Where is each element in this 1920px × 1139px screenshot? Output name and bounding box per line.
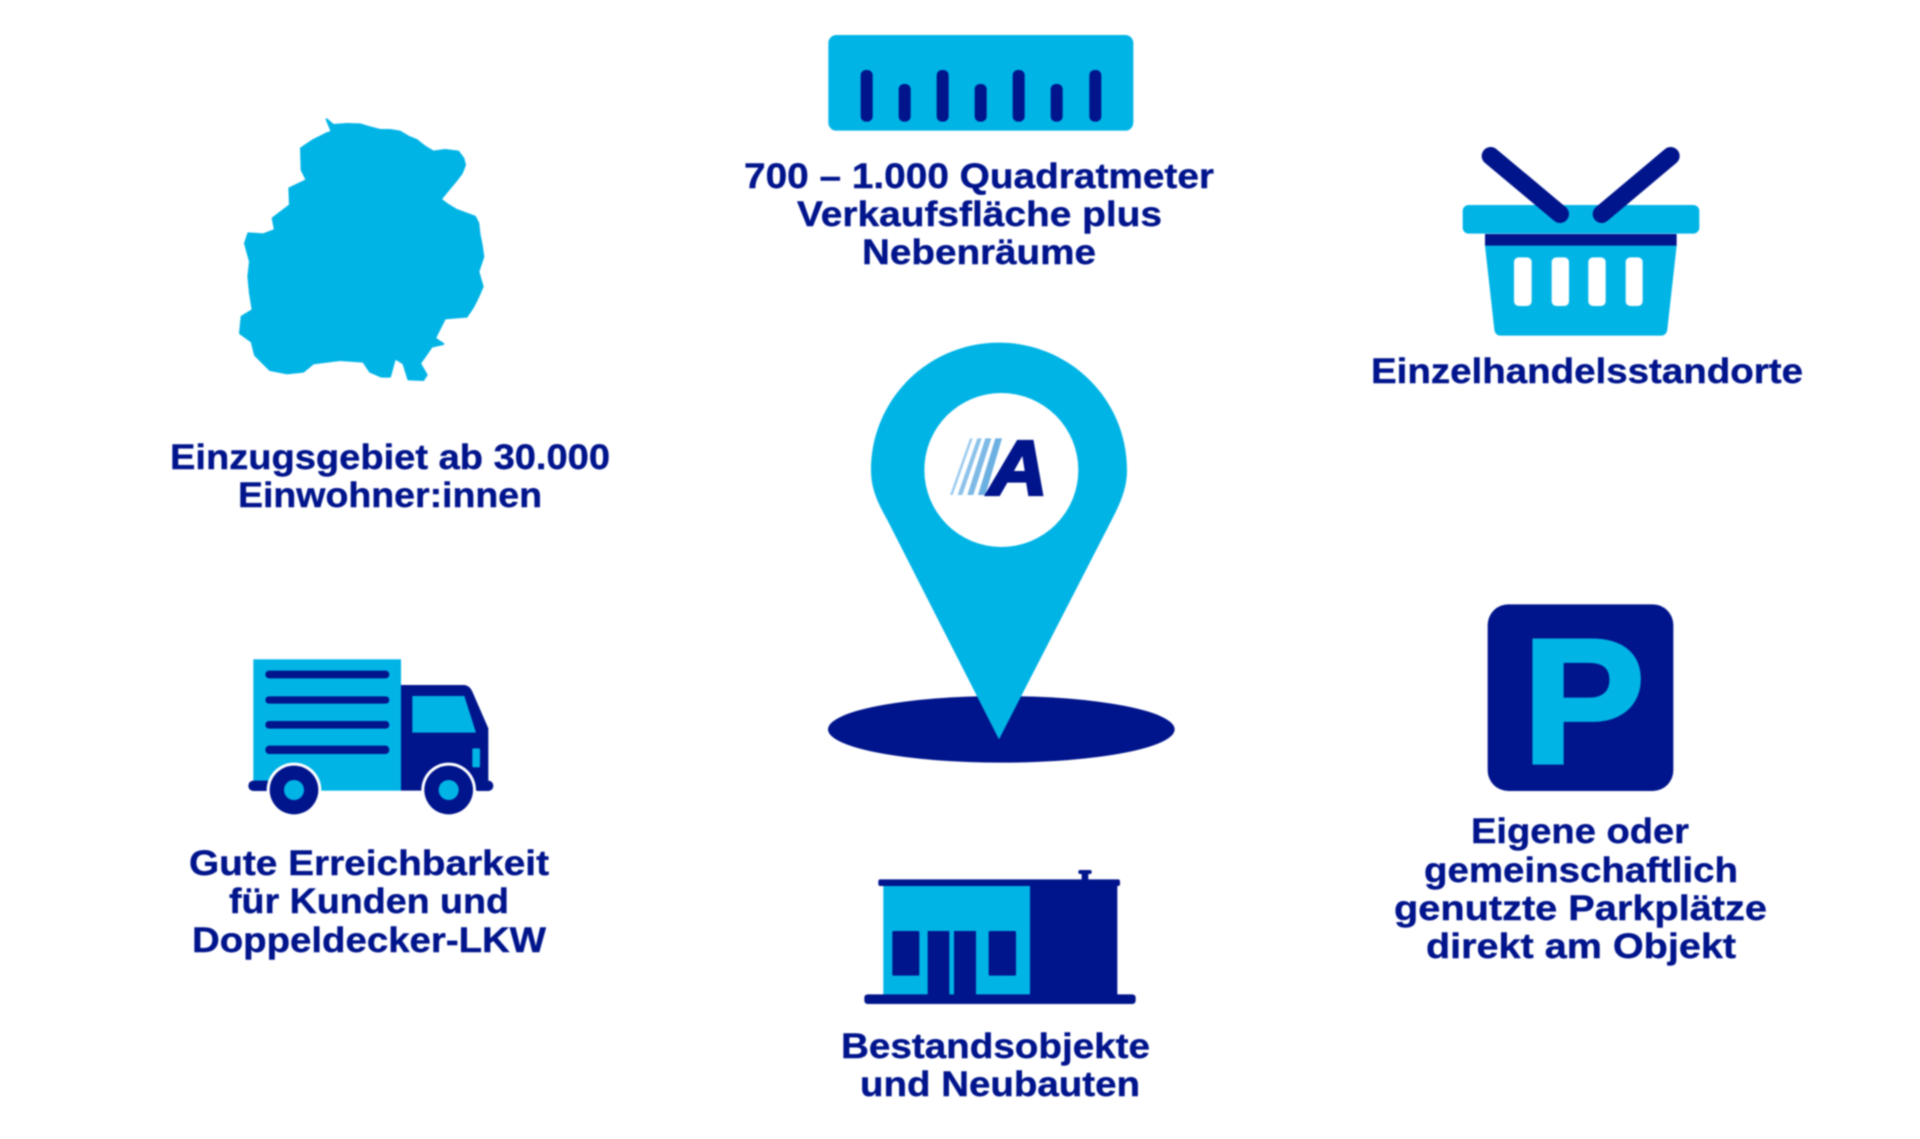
text: retail locations: Einzelhandelsstandorte (1371, 352, 1803, 391)
text: sales area (744, 157, 1214, 272)
text: accessibility: für Kunden und (229, 882, 509, 921)
logo: letter A: A (987, 425, 1047, 511)
text: catchment area (170, 438, 610, 515)
text: accessibility: Gute Erreichbarkeit (189, 844, 549, 883)
text: accessibility (189, 844, 549, 960)
text: existing and new buildings (841, 1027, 1150, 1104)
icon: location pin with logo (828, 343, 1175, 763)
icon: parking sign: P (1523, 603, 1645, 800)
icon: catchment area map (240, 119, 483, 380)
text: existing and new buildings: und Neubauten (860, 1065, 1140, 1104)
icon: delivery truck (248, 659, 493, 817)
text: parking: Eigene oder (1471, 812, 1689, 851)
icon: parking sign (1488, 603, 1673, 800)
text: parking: direkt am Objekt (1426, 927, 1736, 966)
text: existing and new buildings: Bestandsobjekte (841, 1027, 1150, 1066)
text: catchment area: Einzugsgebiet ab 30.000 (170, 438, 610, 477)
icon: shopping basket (1463, 156, 1699, 336)
text: catchment area: Einwohner:innen (238, 476, 542, 515)
text: accessibility: Doppeldecker-LKW (192, 921, 546, 960)
icon: building (864, 870, 1136, 1004)
text: sales area: Nebenräume (862, 233, 1096, 272)
logo: stripes (950, 438, 1002, 495)
text: parking: gemeinschaftlich (1424, 851, 1738, 890)
text: sales area: 700 – 1.000 Quadratmeter (744, 157, 1214, 196)
text: sales area: Verkaufsfläche plus (797, 195, 1162, 234)
icon: ruler (828, 35, 1133, 131)
text: parking (1394, 812, 1767, 966)
text: parking: genutzte Parkplätze (1394, 889, 1767, 928)
